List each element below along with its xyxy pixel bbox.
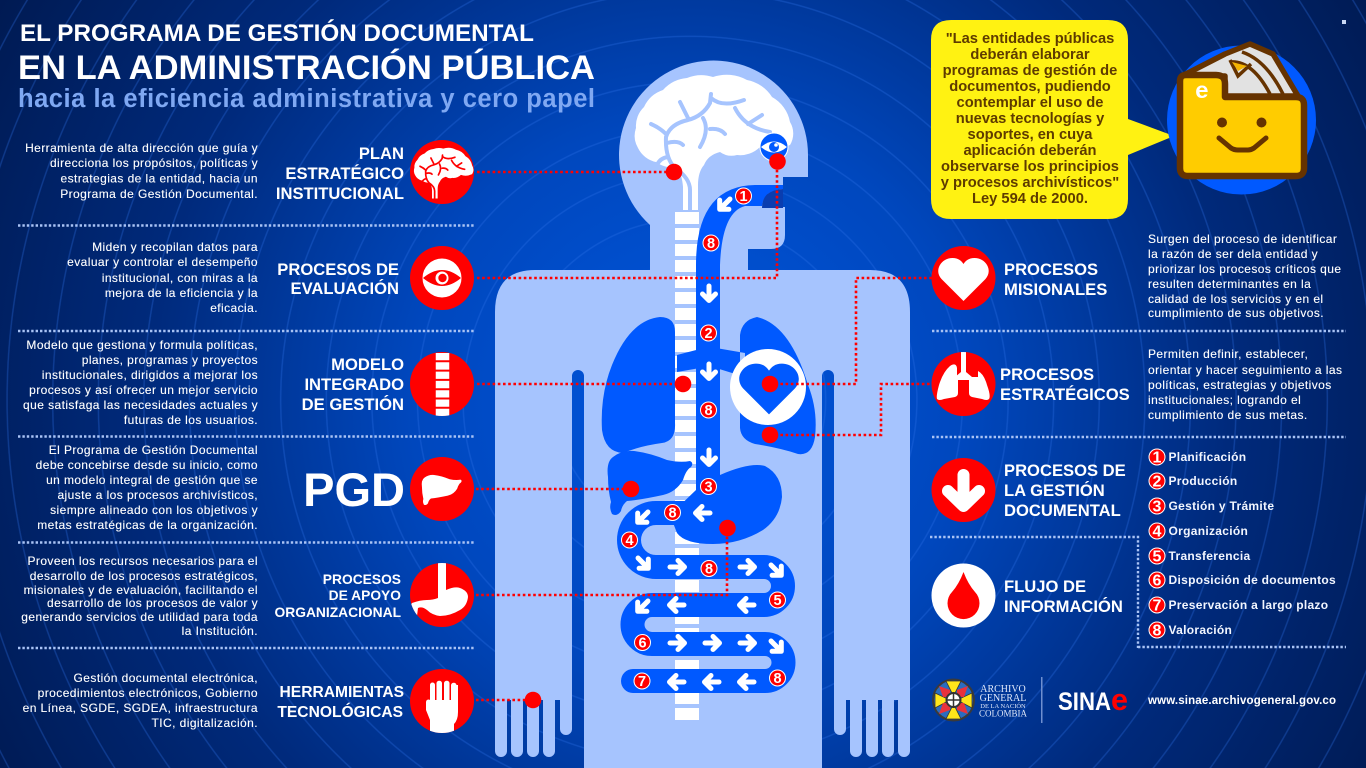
numbered flow badges: 6 — [638, 636, 647, 652]
description: resulten determinantes en la — [1148, 277, 1311, 291]
title: hacia la eficiencia administrativa y cero papel — [18, 85, 595, 113]
icon: lungs — [932, 350, 996, 416]
logo: archivo general — [933, 680, 974, 720]
quote text: y procesos archivísticos" — [941, 175, 1119, 191]
description: cumplimiento de sus metas. — [1148, 408, 1308, 422]
logo text: COLOMBIA — [979, 708, 1027, 718]
heading: LA GESTIÓN — [1004, 481, 1105, 500]
icon: down arrow — [932, 458, 996, 522]
quote text: contemplar el uso de — [957, 95, 1103, 111]
icon: brain — [410, 140, 474, 204]
description: metas estratégicas de la organización. — [37, 518, 258, 532]
title — [18, 19, 595, 113]
folder face — [1217, 118, 1266, 150]
description: El Programa de Gestión Documental — [49, 443, 258, 457]
panel: procesos estratégicos — [932, 347, 1342, 422]
heading: ORGANIZACIONAL — [275, 605, 401, 620]
left dividers — [18, 226, 475, 648]
legend: document management steps: 5 — [1153, 548, 1162, 566]
esophagus — [696, 185, 783, 480]
liver — [608, 451, 692, 515]
heading: PROCESOS — [1004, 260, 1098, 279]
legend: document management steps: 1 — [1153, 450, 1162, 466]
description: desarrollo de los procesos estratégicos, — [30, 569, 258, 583]
legend: document management steps — [1149, 449, 1336, 640]
description: la Institución. — [182, 624, 258, 638]
legend: document management steps: Planificación — [1168, 450, 1246, 464]
panel: modelo integrado — [23, 338, 474, 427]
description: cumplimiento de sus objetivos. — [1148, 306, 1324, 320]
description: orientar y hacer seguimiento a las — [1148, 363, 1342, 377]
description: direcciona los propósitos, políticas y — [50, 156, 258, 170]
corner mark — [1342, 20, 1346, 24]
heading: EVALUACIÓN — [291, 279, 399, 298]
logo divider — [1041, 677, 1042, 723]
heading: ESTRATÉGICO — [285, 164, 404, 183]
description: desarrollo de los procesos de valor y — [47, 596, 258, 610]
description: ajuste a los procesos archivísticos, — [57, 488, 258, 502]
description: futuras de los usuarios. — [124, 413, 258, 427]
description: un modelo integral de gestión que se — [46, 473, 258, 487]
logo: SINAe — [1058, 682, 1128, 717]
description: en Línea, SGDE, SGDEA, infraestructura — [23, 701, 258, 715]
heading: PROCESOS — [1000, 365, 1094, 384]
title: EN LA ADMINISTRACIÓN PÚBLICA — [18, 49, 595, 87]
numbered flow badges: 4 — [625, 533, 634, 549]
description: Herramienta de alta dirección que guía y — [25, 141, 258, 155]
heading: INTEGRADO — [304, 375, 404, 394]
spine — [675, 212, 699, 723]
numbered flow badges: 8 — [705, 562, 713, 578]
description: estrategias de la entidad, hacia un — [60, 172, 258, 186]
legend: document management steps: Gestión y Trámite — [1168, 499, 1274, 513]
quote text: soportes, en cuya — [968, 127, 1093, 143]
heading: PGD — [303, 463, 405, 516]
description: debe concebirse desde su inicio, como — [36, 458, 258, 472]
icon: heart — [932, 246, 996, 310]
numbered flow badges: 8 — [668, 506, 677, 522]
panel: procesos de apoyo — [21, 554, 474, 638]
legend: document management steps: 2 — [1153, 474, 1162, 490]
icon: spine — [410, 352, 474, 416]
heading: PROCESOS DE — [1004, 461, 1126, 480]
heading: MODELO — [331, 355, 404, 374]
description: calidad de los servicios y en el — [1148, 292, 1324, 306]
numbered flow badges: 8 — [704, 403, 713, 419]
icon: drop — [932, 564, 996, 628]
numbered flow badges: 8 — [707, 236, 715, 252]
numbered flow badges — [622, 188, 786, 690]
heading: TECNOLÓGICAS — [277, 702, 403, 721]
description: que satisfaga las necesidades actuales y — [23, 398, 258, 412]
dotted connectors — [476, 161, 932, 700]
numbered flow badges: 5 — [773, 593, 782, 609]
quote text: documentos, pudiendo — [949, 79, 1111, 95]
description: Modelo que gestiona y formula políticas, — [26, 338, 258, 352]
description: Programa de Gestión Documental. — [60, 187, 258, 201]
legend: document management steps: 7 — [1153, 598, 1162, 614]
panel: PGD — [36, 443, 474, 532]
legend: document management steps: 3 — [1153, 498, 1162, 516]
numbered flow badges: 2 — [704, 326, 713, 342]
panel: procesos de la gestión documental — [932, 458, 1126, 522]
logo text: ARCHIVO — [980, 684, 1026, 695]
logo text: GENERAL — [980, 693, 1026, 704]
folder body — [1180, 75, 1304, 176]
quote text: nuevas tecnologías y — [956, 111, 1105, 127]
description: misionales y de evaluación, facilitando el — [24, 583, 258, 597]
heading: DE APOYO — [329, 588, 401, 603]
title: EL PROGRAMA DE GESTIÓN DOCUMENTAL — [20, 19, 534, 47]
heading: MISIONALES — [1004, 280, 1107, 299]
panel: plan estratégico — [25, 140, 474, 204]
heading: PLAN — [359, 144, 404, 163]
description: institucional, con miras a la — [102, 271, 258, 285]
numbered flow badges: 3 — [704, 480, 713, 496]
heading: HERRAMIENTAS — [280, 684, 404, 701]
description: procesos y así ofrecer un mejor servicio — [29, 383, 258, 397]
description: institucionales; logrando el — [1148, 393, 1301, 407]
heading: FLUJO DE — [1004, 577, 1086, 596]
stomach — [670, 465, 782, 544]
legend: document management steps: Organización — [1168, 524, 1248, 538]
body illustration — [495, 61, 910, 768]
description: planes, programas y proyectos — [82, 353, 258, 367]
icon: stomach — [410, 560, 474, 627]
icon: hand — [410, 669, 474, 736]
description: mejora de la eficiencia y la — [105, 286, 258, 300]
heading: DE GESTIÓN — [302, 395, 404, 414]
speech bubble — [931, 20, 1174, 219]
description: TIC, digitalización. — [152, 716, 258, 730]
flow arrows — [633, 194, 786, 689]
legend: document management steps: Valoración — [1168, 623, 1232, 637]
legend: document management steps: Disposición de documentos — [1168, 573, 1336, 587]
numbered flow badges: 7 — [638, 674, 646, 690]
heading: PROCESOS — [323, 572, 401, 587]
description: eficacia. — [210, 301, 258, 315]
heading: DOCUMENTAL — [1004, 501, 1121, 520]
quote text: "Las entidades públicas — [946, 31, 1114, 47]
mascot: folder — [1167, 44, 1316, 194]
legend: document management steps: Producción — [1168, 474, 1238, 488]
panel: flujo de información — [932, 564, 1123, 628]
quote text: aplicación deberán — [963, 143, 1097, 159]
quote text: programas de gestión de — [943, 63, 1117, 79]
logo: SINAe: e — [1111, 682, 1128, 717]
numbered flow badges: 8 — [773, 671, 782, 687]
description: evaluar y controlar el desempeño — [67, 255, 258, 269]
website: www.sinae.archivogeneral.gov.co — [1147, 695, 1336, 707]
quote text: deberán elaborar — [970, 47, 1090, 63]
description: Permiten definir, establecer, — [1148, 347, 1308, 361]
folder e mark: e — [1195, 79, 1209, 105]
description: generando servicios de utilidad para toda — [21, 610, 258, 624]
icon: eye — [410, 246, 474, 310]
lungs — [602, 317, 816, 454]
description: Miden y recopilan datos para — [92, 240, 258, 254]
legend: document management steps: Transferencia — [1168, 549, 1250, 563]
quote text: observarse los principios — [941, 159, 1119, 175]
description: la razón de ser dela entidad y — [1148, 247, 1318, 261]
description: Surgen del proceso de identificar — [1148, 232, 1337, 246]
description: procedimientos electrónicos, Gobierno — [38, 686, 258, 700]
panel: procesos de evaluación — [67, 240, 474, 315]
right dividers — [930, 331, 1346, 648]
heart — [730, 349, 806, 425]
quote text: Ley 594 de 2000. — [972, 191, 1088, 207]
description: políticas, estrategias y objetivos — [1148, 378, 1332, 392]
legend: document management steps: 8 — [1153, 622, 1162, 640]
logo text: DE LA NACIÓN — [980, 702, 1026, 710]
heading: INSTITUCIONAL — [276, 184, 404, 203]
icon: liver — [410, 457, 474, 521]
connector dots — [525, 153, 786, 708]
description: siempre alineado con los objetivos y — [50, 503, 258, 517]
legend: document management steps: 6 — [1153, 572, 1162, 590]
description: institucionales, dirigidos a mejorar los — [42, 368, 258, 382]
heading: INFORMACIÓN — [1004, 597, 1123, 616]
heading: ESTRATÉGICOS — [1000, 385, 1130, 404]
description: Proveen los recursos necesarios para el — [28, 554, 258, 568]
mouth — [762, 189, 783, 208]
description: priorizar los procesos críticos que — [1148, 262, 1341, 276]
legend: document management steps: Preservación a largo plazo — [1168, 598, 1328, 612]
panel: herramientas — [23, 669, 474, 736]
panel: procesos misionales — [932, 232, 1341, 320]
brain — [635, 75, 793, 210]
logo: SINAe: SINA — [1058, 688, 1111, 716]
heading: PROCESOS DE — [277, 260, 399, 279]
legend: document management steps: 4 — [1153, 524, 1162, 540]
body silhouette — [495, 61, 910, 768]
numbered flow badges: 1 — [739, 189, 748, 205]
intestine — [629, 480, 784, 681]
papers — [1182, 44, 1298, 96]
description: Gestión documental electrónica, — [74, 671, 258, 685]
eye — [760, 133, 788, 161]
